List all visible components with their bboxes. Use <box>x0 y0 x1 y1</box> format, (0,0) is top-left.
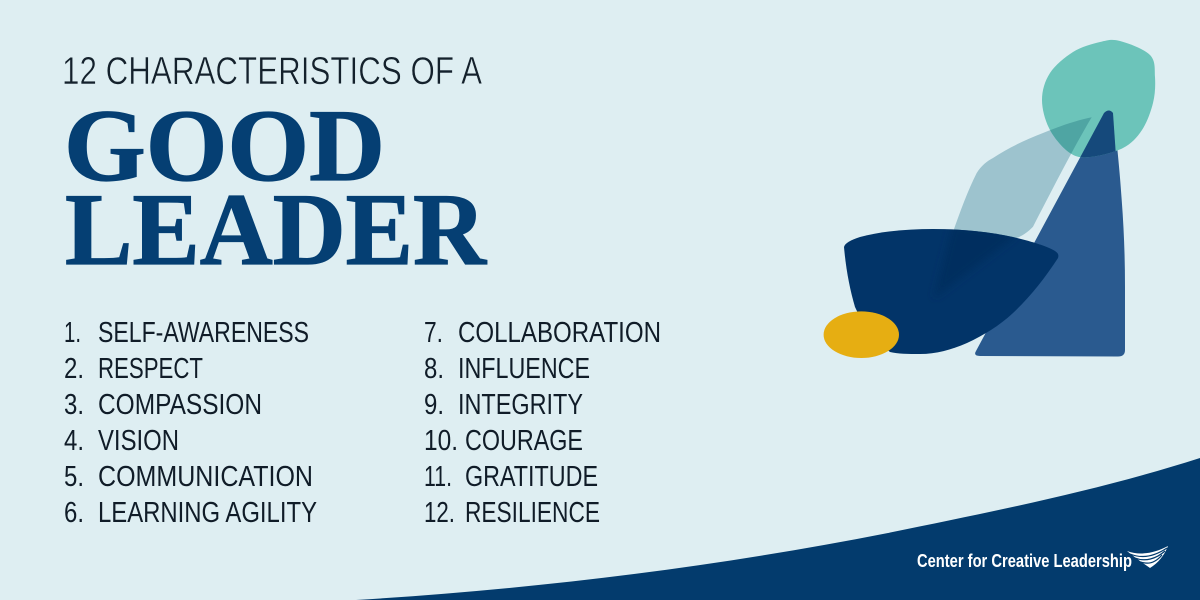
shape: teal blob <box>1042 40 1155 157</box>
heading: 12 characteristics of a: 12 CHARACTERISTICS OF A <box>62 50 482 93</box>
item 5: COMMUNICATION <box>98 461 313 493</box>
list: characteristics 7 to 12 <box>424 317 661 529</box>
item 2: RESPECT <box>98 353 203 385</box>
item 12 <box>424 497 600 529</box>
heading word: good: GOOD <box>64 89 385 203</box>
shape: blue triangle <box>975 110 1125 356</box>
item 6: LEARNING AGILITY <box>98 497 317 529</box>
shape: navy bowl <box>844 229 1058 354</box>
heading word: leader: LEADER <box>65 173 488 287</box>
item 12: 12. <box>424 497 455 529</box>
item 9: INTEGRITY <box>458 389 583 421</box>
item 1: SELF-AWARENESS <box>98 317 309 349</box>
item 9 <box>424 389 583 421</box>
item 11 <box>424 461 598 493</box>
overlap: teal over pale blue <box>1050 117 1092 154</box>
item 1: 1. <box>64 317 81 349</box>
shape: yellow ellipse <box>824 311 899 358</box>
item 6: 6. <box>64 497 84 529</box>
item 3: 3. <box>64 389 84 421</box>
overlap: teal over triangle <box>1080 110 1116 158</box>
item 11: GRATITUDE <box>465 461 598 493</box>
item 12: RESILIENCE <box>465 497 600 529</box>
illustration: abstract shapes <box>824 40 1155 358</box>
item 8: 8. <box>424 353 444 385</box>
item 4: VISION <box>98 425 179 457</box>
item 8: INFLUENCE <box>458 353 590 385</box>
shape: pale blue hexagon <box>953 117 1092 238</box>
list: characteristics 1 to 6 <box>64 317 317 529</box>
item 5: 5. <box>64 461 84 493</box>
item 4 <box>64 425 179 457</box>
item 10: COURAGE <box>465 425 583 457</box>
logo text: Center for Creative Leadership <box>917 550 1132 571</box>
item 3: COMPASSION <box>98 389 262 421</box>
item 7: 7. <box>424 317 443 349</box>
item 10 <box>424 425 583 457</box>
item 9: 9. <box>424 389 444 421</box>
overlap: shadow inside bowl <box>942 229 1016 284</box>
item 11: 11. <box>424 461 452 493</box>
item 7: COLLABORATION <box>458 317 661 349</box>
logo <box>917 546 1168 571</box>
logo icon: wing <box>1127 546 1168 568</box>
item 2 <box>64 353 203 385</box>
item 10: 10. <box>424 425 458 457</box>
item 8 <box>424 353 590 385</box>
heading: good leader <box>64 89 488 287</box>
item 4: 4. <box>64 425 84 457</box>
item 2: 2. <box>64 353 84 385</box>
footer navy curve <box>356 458 1200 600</box>
